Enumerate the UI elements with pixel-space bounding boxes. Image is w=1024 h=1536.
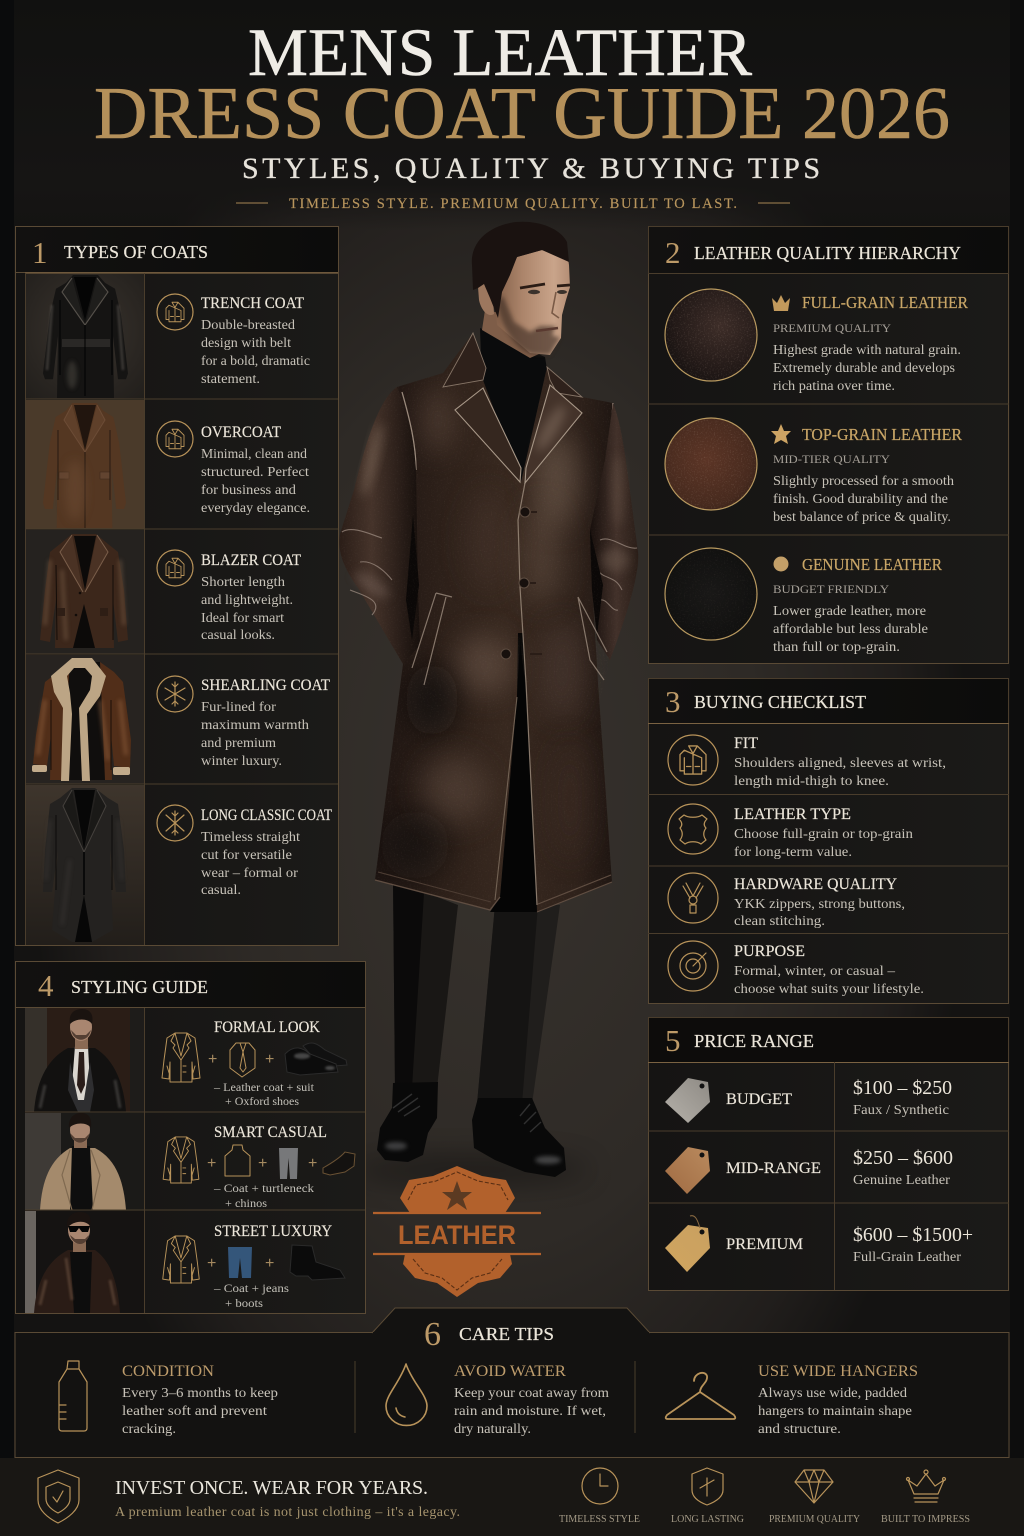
tier: mid-range: MID-RANGE [726, 1160, 821, 1177]
item: leather type [668, 804, 913, 859]
row: trench coat: statement. [201, 371, 260, 386]
icon: hanger [666, 1373, 735, 1419]
row: smart casual outfit: – Coat + turtleneck [213, 1183, 314, 1195]
gaps between arms and body [406, 515, 603, 640]
row: smart casual outfit [163, 1124, 355, 1210]
row: street luxury outfit [163, 1223, 345, 1310]
panel: leather quality hierarchy [648, 226, 1009, 664]
tip: avoid water: rain and moisture. If wet, [454, 1403, 606, 1418]
row: blazer coat: BLAZER COAT [201, 552, 301, 569]
coat sheen [381, 386, 590, 879]
dark gap below placket [490, 633, 537, 912]
row: shearling coat: and premium [201, 735, 277, 750]
row: blazer coat: Shorter length [201, 574, 285, 589]
row: overcoat: Minimal, clean and [201, 446, 307, 461]
tier: top-grain leather: Slightly processed for a smooth [773, 473, 954, 488]
heading: types of coats: TYPES OF COATS [64, 242, 208, 262]
heading: leather quality hierarchy: LEATHER QUALITY HIERARCHY [694, 243, 961, 263]
swatch: genuine [665, 548, 757, 640]
row: long classic coat: cut for versatile [201, 847, 292, 862]
panel: buying checklist [648, 678, 1009, 1004]
thumbnail: shearling coat [26, 655, 144, 784]
tier: full-grain leather [772, 293, 969, 393]
ear [478, 284, 494, 315]
item: leather type: LEATHER TYPE [734, 806, 851, 823]
row: smart casual outfit: + [308, 1155, 317, 1172]
thumbnail: long classic coat [26, 785, 144, 945]
coat body [375, 333, 613, 912]
row: trench coat: for a bold, dramatic [201, 353, 310, 368]
title: MENS LEATHER [248, 14, 753, 90]
tier: full-grain leather: FULL-GRAIN LEATHER [802, 293, 969, 312]
photo: formal look [25, 1008, 130, 1112]
tip: condition: cracking. [122, 1421, 176, 1436]
footer message [115, 1477, 460, 1520]
row: smart casual outfit: SMART CASUAL [214, 1124, 327, 1141]
row: smart casual outfit: + [207, 1155, 216, 1172]
icon: star [771, 424, 791, 444]
thumbnail: blazer coat [26, 530, 144, 654]
icon: boot [290, 1245, 345, 1280]
badge: built to impress [881, 1470, 970, 1525]
tip: use wide hangers: USE WIDE HANGERS [758, 1363, 918, 1380]
panel: care tips [15, 1308, 1009, 1458]
photo: street luxury [25, 1211, 120, 1313]
leather grain [344, 374, 634, 908]
panel: styling guide [16, 962, 366, 1314]
item: hardware quality: YKK zippers, strong buttons, [734, 896, 905, 911]
row: smart casual outfit: + [258, 1155, 267, 1172]
tier: mid-range: Genuine Leather [853, 1172, 951, 1187]
row: formal look outfit: + [208, 1051, 217, 1068]
icon: water drop [386, 1364, 427, 1425]
tier: genuine leather [773, 555, 943, 654]
tier: genuine leather: BUDGET FRIENDLY [773, 582, 889, 596]
icon: shield [38, 1470, 79, 1523]
beard [497, 296, 560, 355]
item: fit: Shoulders aligned, sleeves at wrist, [734, 755, 946, 770]
badge: timeless style: TIMELESS STYLE [559, 1514, 640, 1525]
leather badge [373, 1166, 541, 1297]
item: fit [668, 735, 946, 788]
neck [482, 310, 548, 358]
item: fit: FIT [734, 735, 758, 752]
leather badge: LEATHER [398, 1220, 516, 1250]
tier: premium [665, 1216, 973, 1272]
title: TIMELESS STYLE. PREMIUM QUALITY. BUILT TO LAST. [289, 196, 737, 212]
tier: genuine leather: affordable but less durable [773, 621, 928, 636]
badge: premium quality: PREMIUM QUALITY [769, 1514, 860, 1525]
icon: crown [772, 295, 790, 311]
title: DRESS COAT GUIDE 2026 [94, 73, 950, 155]
row: trench coat: Double-breasted [201, 317, 295, 332]
icon: silver tag [665, 1078, 710, 1123]
tier: budget: BUDGET [726, 1091, 792, 1108]
badge: long lasting: LONG LASTING [671, 1514, 744, 1525]
badge: timeless style [559, 1468, 640, 1525]
tip: condition: Every 3–6 months to keep [122, 1385, 278, 1400]
heading: buying checklist: 3 [665, 684, 680, 719]
row: overcoat: for business and [201, 482, 296, 497]
tier: top-grain leather: finish. Good durability and the [773, 491, 948, 506]
turtleneck [480, 328, 549, 490]
title: STYLES, QUALITY & BUYING TIPS [242, 152, 820, 185]
tier: genuine leather: than full or top-grain. [773, 639, 900, 654]
tier: full-grain leather: rich patina over time. [773, 378, 895, 393]
row: formal look outfit: FORMAL LOOK [214, 1019, 320, 1036]
swatch: top-grain [665, 418, 757, 510]
hair [472, 222, 569, 318]
heading: price range [665, 1023, 814, 1058]
tip: avoid water [386, 1363, 610, 1436]
tier: premium: $600 – $1500+ [853, 1224, 973, 1246]
tip: condition: leather soft and prevent [122, 1403, 267, 1418]
swatch: full-grain [665, 289, 757, 381]
hero figure: man in leather coat [338, 222, 640, 1184]
tip: use wide hangers [666, 1363, 918, 1436]
tip: use wide hangers: and structure. [758, 1421, 841, 1436]
heading: price range: PRICE RANGE [694, 1031, 814, 1051]
item: hardware quality: HARDWARE QUALITY [734, 876, 897, 893]
row: shearling coat: maximum warmth [201, 717, 309, 732]
heading: leather quality hierarchy [665, 235, 961, 270]
row: overcoat: everyday elegance. [201, 500, 310, 515]
tip: use wide hangers: hangers to maintain shape [758, 1403, 912, 1418]
row: long classic coat [157, 805, 332, 897]
tier: mid-range: $250 – $600 [853, 1147, 953, 1169]
shoes [377, 1082, 566, 1177]
icon: bottle [59, 1361, 87, 1431]
row: formal look outfit: + [265, 1051, 274, 1068]
tier: top-grain leather: MID-TIER QUALITY [773, 452, 890, 466]
tier: top-grain leather: best balance of price & quality. [773, 509, 951, 524]
row: formal look outfit: – Leather coat + suit [213, 1082, 315, 1094]
row: long classic coat: casual. [201, 882, 241, 897]
heading: styling guide [38, 968, 208, 1003]
tip: avoid water: Keep your coat away from [454, 1385, 610, 1400]
tier: budget: Faux / Synthetic [853, 1102, 949, 1117]
heading: types of coats: 1 [32, 235, 48, 270]
icon: jeans [228, 1247, 252, 1278]
icon: brown tag [665, 1147, 710, 1194]
tier: full-grain leather: Highest grade with natural grain. [773, 342, 961, 357]
row: blazer coat: and lightweight. [201, 592, 293, 607]
icon: chinos [279, 1148, 298, 1179]
heading: leather quality hierarchy: 2 [665, 235, 680, 270]
tip: use wide hangers: Always use wide, padded [758, 1385, 907, 1400]
tip: avoid water: dry naturally. [454, 1421, 531, 1436]
row: blazer coat: casual looks. [201, 627, 275, 642]
item: purpose: choose what suits your lifestyle. [734, 981, 924, 996]
tier: premium: Full-Grain Leather [853, 1249, 962, 1264]
buttons [501, 507, 542, 659]
footer message: A premium leather coat is not just clothing – it's a legacy. [115, 1505, 460, 1520]
trousers [393, 880, 560, 1104]
item: leather type: for long-term value. [734, 844, 852, 859]
tier: full-grain leather: Extremely durable and develops [773, 360, 955, 375]
lapels and collar [443, 333, 582, 483]
row: trench coat: design with belt [201, 335, 291, 350]
icon: oxford shoes [285, 1043, 347, 1075]
heading: price range: 5 [665, 1023, 680, 1058]
right arm [590, 403, 638, 660]
row: street luxury outfit: + [265, 1255, 274, 1272]
heading: buying checklist [665, 684, 866, 719]
row: smart casual outfit: + chinos [225, 1198, 268, 1210]
item: purpose [668, 941, 924, 996]
floor shadow [350, 1156, 590, 1184]
tier: budget: $100 – $250 [853, 1077, 952, 1099]
item: purpose: PURPOSE [734, 943, 805, 960]
heading: styling guide: 4 [38, 968, 54, 1003]
panel: price range [648, 1018, 1009, 1290]
row: street luxury outfit: + boots [225, 1298, 264, 1310]
badge: built to impress: BUILT TO IMPRESS [881, 1514, 970, 1525]
heading: buying checklist: BUYING CHECKLIST [694, 692, 866, 712]
row: formal look outfit [162, 1019, 347, 1108]
item: purpose: Formal, winter, or casual – [734, 963, 895, 978]
item: leather type: Choose full-grain or top-grain [734, 826, 913, 841]
icon: dot [774, 556, 788, 572]
footer message: INVEST ONCE. WEAR FOR YEARS. [115, 1477, 428, 1499]
tier: top-grain leather [771, 424, 963, 524]
item: fit: length mid-thigh to knee. [734, 773, 889, 788]
footer [0, 1458, 1024, 1536]
row: trench coat [157, 294, 310, 386]
row: shearling coat: Fur-lined for [201, 699, 277, 714]
tier: genuine leather: GENUINE LEATHER [802, 555, 943, 574]
heading: care tips: 6 [424, 1316, 441, 1353]
panel: types of coats [16, 226, 338, 946]
tier: full-grain leather: PREMIUM QUALITY [773, 321, 891, 335]
item: hardware quality: clean stitching. [734, 913, 825, 928]
badge: premium quality [769, 1470, 860, 1525]
row: trench coat: TRENCH COAT [201, 295, 304, 312]
facial features [520, 284, 570, 331]
tip: condition [59, 1361, 278, 1436]
badge: long lasting [671, 1468, 744, 1525]
row: long classic coat: Timeless straight [201, 829, 300, 844]
tip: avoid water: AVOID WATER [454, 1363, 566, 1380]
row: formal look outfit: + Oxford shoes [225, 1096, 300, 1108]
thumbnail: overcoat [26, 400, 144, 529]
row: long classic coat: LONG CLASSIC COAT [201, 807, 332, 824]
tip: condition: CONDITION [122, 1363, 214, 1380]
row: street luxury outfit: STREET LUXURY [214, 1223, 332, 1240]
title [94, 14, 950, 212]
photo: smart casual [25, 1113, 126, 1210]
row: shearling coat [157, 676, 330, 768]
row: shearling coat: SHEARLING COAT [201, 677, 330, 694]
heading: care tips: CARE TIPS [459, 1324, 554, 1344]
icon: loafer [323, 1152, 355, 1175]
row: street luxury outfit: + [207, 1255, 216, 1272]
pockets [412, 593, 607, 685]
row: blazer coat [157, 550, 301, 642]
row: street luxury outfit: – Coat + jeans [213, 1283, 290, 1295]
thumbnail: trench coat [26, 274, 144, 399]
icon: gold tag [665, 1216, 710, 1272]
tier: budget [665, 1077, 952, 1123]
head [472, 222, 570, 358]
heading: types of coats [32, 235, 208, 270]
row: overcoat [157, 421, 310, 515]
heading: styling guide: STYLING GUIDE [71, 977, 208, 997]
left arm [339, 387, 420, 664]
tier: mid-range [665, 1147, 953, 1194]
row: blazer coat: Ideal for smart [201, 610, 284, 625]
heading: care tips [424, 1316, 554, 1353]
row: long classic coat: wear – formal or [201, 865, 299, 880]
row: shearling coat: winter luxury. [201, 753, 282, 768]
row: overcoat: OVERCOAT [201, 424, 281, 441]
item: hardware quality [668, 873, 905, 928]
face [495, 250, 570, 355]
tier: genuine leather: Lower grade leather, more [773, 603, 926, 618]
row: overcoat: structured. Perfect [201, 464, 309, 479]
tier: premium: PREMIUM [726, 1236, 803, 1253]
tier: top-grain leather: TOP-GRAIN LEATHER [802, 425, 963, 444]
